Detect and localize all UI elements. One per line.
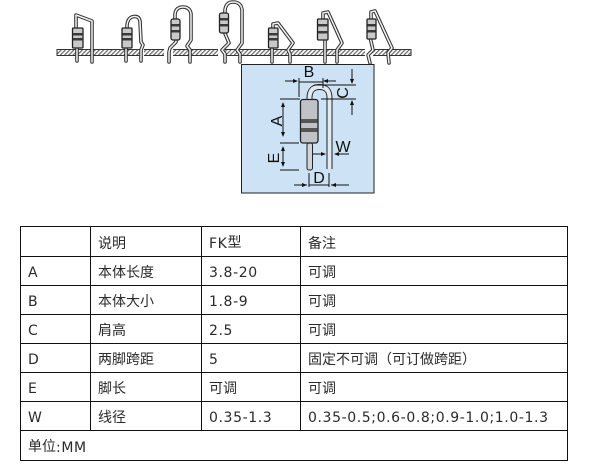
specification table: 可调 (308, 378, 336, 398)
dimension diagram panel (242, 64, 374, 193)
specification table: 单位:MM (28, 436, 87, 456)
specification table: 2.5 (209, 323, 233, 339)
specification table: 1.8-9 (209, 294, 248, 310)
specification table: 可调 (308, 262, 336, 282)
specification table: 固定不可调（可订做跨距） (308, 349, 476, 369)
resistor 2 (122, 16, 143, 61)
specification table: 本体大小 (98, 291, 154, 311)
specification table: 本体长度 (98, 262, 154, 282)
specification table: 肩高 (98, 320, 126, 340)
specification table (20, 226, 568, 461)
resistor 7 (367, 11, 392, 63)
dimension labels (266, 64, 352, 187)
circuit board strip (57, 48, 411, 57)
specification table: 可调 (209, 378, 237, 398)
specification table: E (28, 381, 37, 397)
specification table: A (28, 265, 38, 281)
dimension lines (280, 69, 356, 187)
dimension labels: D (313, 170, 325, 187)
resistor 1 (72, 15, 92, 62)
specification table: 脚长 (98, 378, 126, 398)
specification table: 3.8-20 (209, 265, 258, 281)
dimension labels: W (335, 139, 351, 156)
dimension labels: B (304, 64, 314, 81)
resistor 4 (220, 2, 242, 62)
specification table: 备注 (308, 232, 336, 252)
specification table: 可调 (308, 291, 336, 311)
specification table: 可调 (308, 320, 336, 340)
dimension labels: C (335, 87, 352, 99)
dimension labels: E (266, 153, 283, 163)
dimension arrowheads (281, 79, 354, 187)
specification table: 两脚跨距 (98, 349, 154, 369)
specification table: 线径 (98, 407, 126, 427)
specification table: 0.35-0.5;0.6-0.8;0.9-1.0;1.0-1.3 (308, 410, 549, 426)
specification table: 5 (209, 352, 219, 368)
specification table: D (28, 352, 39, 368)
resistor 5 (268, 23, 293, 62)
resistor drawing with dimensions (300, 87, 330, 170)
specification table: W (28, 410, 42, 426)
resistor 6 (318, 12, 342, 62)
specification table: FK型 (209, 232, 241, 252)
specification table: 说明 (98, 232, 126, 252)
specification table: C (28, 323, 38, 339)
specification table: B (28, 294, 38, 310)
dimension labels: A (269, 115, 286, 126)
specification table: 0.35-1.3 (209, 410, 272, 426)
resistor 3 (169, 7, 191, 62)
